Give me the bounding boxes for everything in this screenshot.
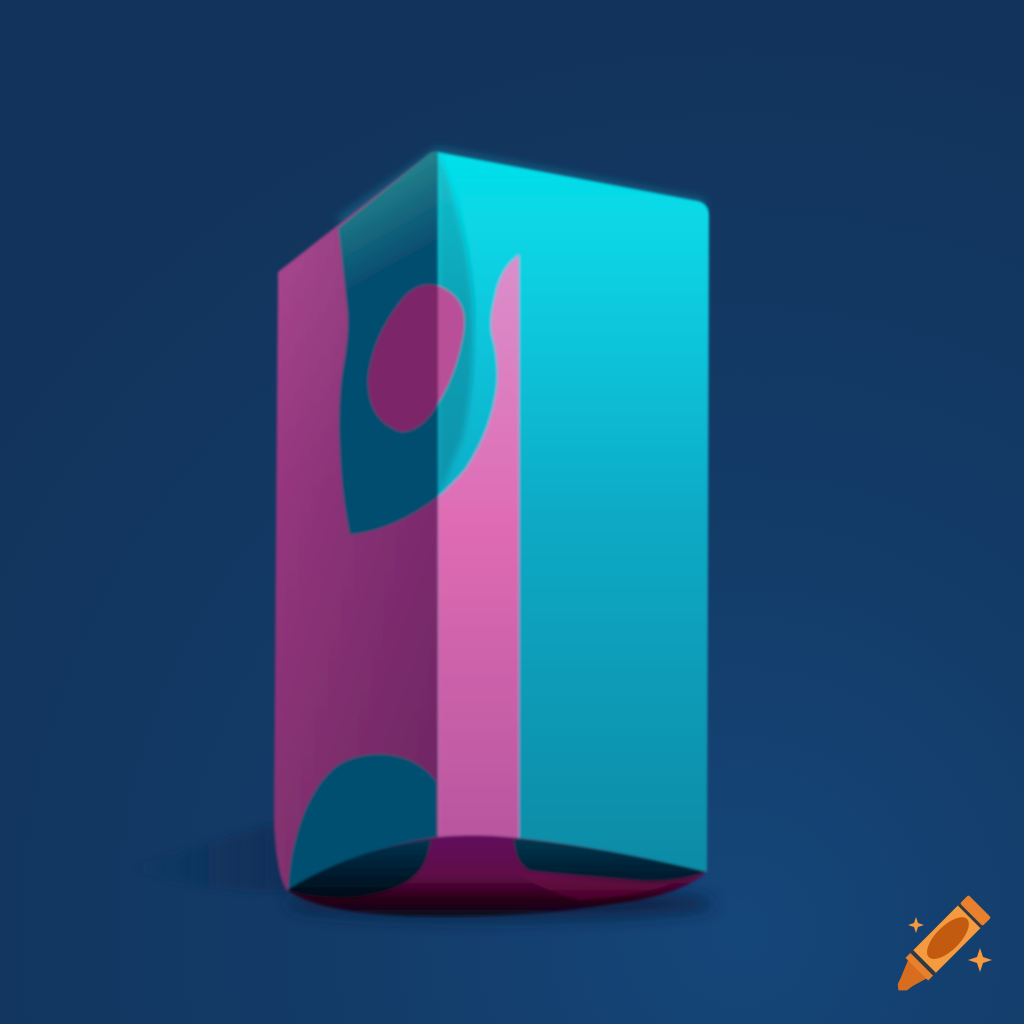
logo: crayon with sparkles: [886, 895, 992, 1000]
illustration: 3D translucent box on dark blue background: [272, 145, 1024, 1024]
bottom face: left dark teal: [287, 839, 431, 898]
crayon oval: [920, 911, 975, 966]
darker cyan band on right face: [438, 152, 474, 497]
left face shading: [274, 152, 438, 892]
left face: pink: [274, 152, 438, 892]
pink strip: [438, 255, 519, 840]
sparkle large: [968, 948, 992, 972]
box: [274, 152, 709, 916]
glow along top edge: [340, 152, 705, 222]
lower teal shape: [288, 754, 437, 890]
crayon band: [910, 950, 936, 976]
floor shadow under box: [285, 889, 715, 919]
bottom crimson glow: [520, 874, 672, 900]
right face: cyan: [438, 152, 709, 872]
crayon cap: [960, 895, 991, 926]
bottom face: right dark teal: [514, 838, 707, 881]
oval: left part: [368, 285, 438, 432]
crayon body: [913, 904, 982, 973]
sparkle small: [908, 917, 924, 933]
oval: right part: [438, 286, 464, 403]
crayon tip: [886, 954, 932, 1000]
crayon band: [958, 903, 983, 928]
floor shadow left of box: [130, 822, 295, 892]
crayon collar: [905, 952, 934, 981]
bottom face: [287, 835, 707, 916]
upper teal shape on left face: [338, 152, 438, 535]
